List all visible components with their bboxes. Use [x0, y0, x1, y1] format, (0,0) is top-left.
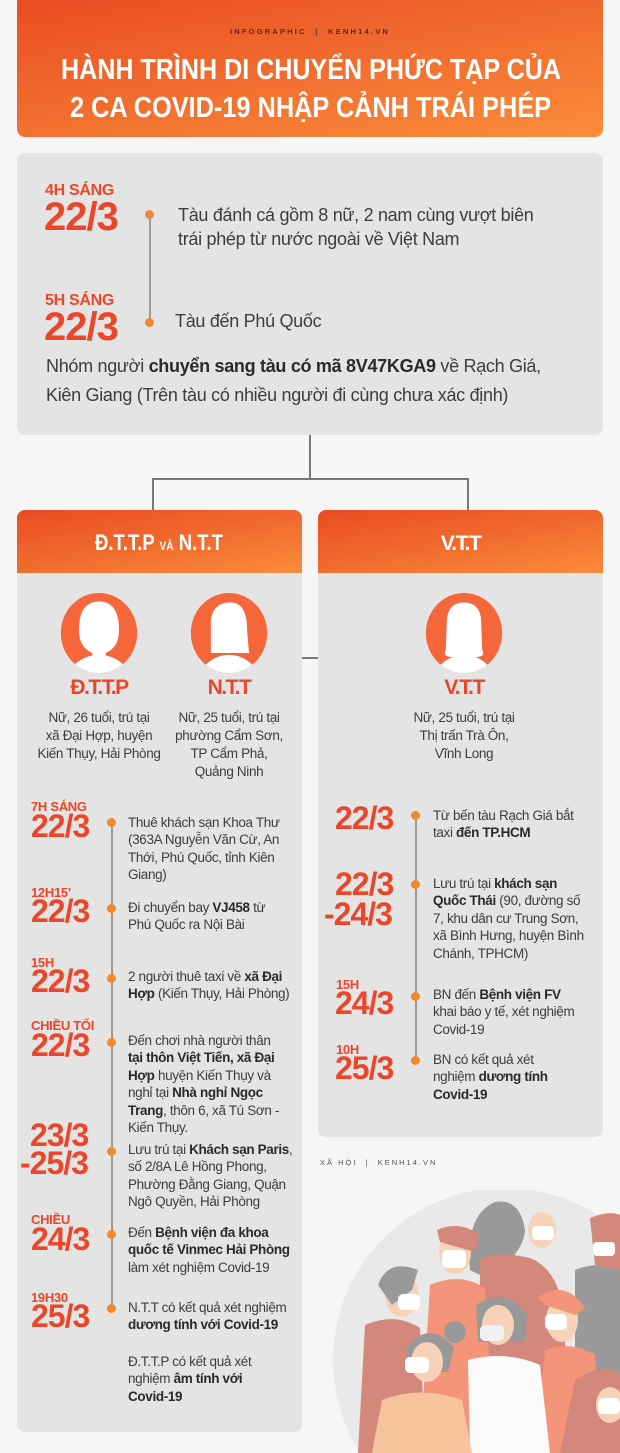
entry: chiều tối: CHIỀU TỐI: [31, 1018, 94, 1033]
entry 1: Tàu đánh cá gồm 8 nữ, 2 nam cùng vượt biên: [178, 205, 534, 225]
entry: 15h: 22/3: [31, 963, 89, 999]
entry: 19h30 25/3: N.T.T có kết quả xét nghiệm: [128, 1300, 286, 1315]
entry: 7h 22/3: [31, 799, 280, 882]
entry: chiều tối: tại thôn Việt Tiến, xã Đại: [128, 1050, 274, 1065]
man gray hair: [358, 1319, 425, 1453]
entry: 19h30 25/3: Đ.T.T.P có kết quả xét: [128, 1354, 251, 1369]
desc DTTP: Nữ, 26 tuổi, trú tại: [48, 710, 150, 725]
entry: 15h 24/3: [335, 977, 574, 1037]
panel header: [17, 510, 302, 573]
entry: 12h15: 22/3: [31, 893, 89, 929]
name VTT: V.T.T: [444, 676, 484, 699]
summary text: [46, 356, 541, 405]
entry: chiều tối: Đến chơi nhà người thân: [128, 1033, 271, 1048]
entry: 22/3: 22/3: [335, 800, 393, 836]
connector lines: [309, 435, 310, 478]
desc NTT: Nữ, 25 tuổi, trú tại: [178, 710, 280, 725]
entry: 22/3-24/3: Lưu trú tại khách sạn: [433, 876, 557, 891]
entry: 12h15: Đi chuyển bay VJ458 từ: [128, 900, 265, 915]
right woman: [575, 1265, 620, 1453]
entry: chiều tối: 22/3: [31, 1027, 89, 1063]
entry: 22/3-24/3: -24/3: [324, 896, 392, 932]
entry: chiều tối: Kiến Thụy.: [128, 1120, 188, 1135]
icon: avatar NTT: [190, 593, 268, 673]
entry: 12h15: [31, 885, 266, 932]
entry: 15h 24/3: BN đến Bệnh viện FV: [433, 987, 561, 1002]
desc NTT: Quảng Ninh: [195, 764, 263, 779]
desc DTTP: Kiến Thụy, Hải Phòng: [37, 746, 161, 761]
entry: 15h 24/3: Covid-19: [433, 1022, 484, 1037]
entry 1: trái phép từ nước ngoài về Việt Nam: [178, 229, 459, 249]
entry: 10h 25/3: 10H: [336, 1042, 359, 1057]
entry: 15h 24/3: khai báo y tế, xét nghiệm: [433, 1004, 574, 1019]
entry: 7h 22/3: (363A Nguyễn Văn Cừ, An: [128, 832, 279, 847]
entry: 23/3-25/3: -25/3: [20, 1145, 88, 1181]
entry: 7h 22/3: 7H SÁNG: [31, 799, 87, 814]
entry: 7h 22/3: Giang): [128, 867, 166, 882]
icon: avatar DTTP: [60, 593, 138, 673]
entry 1: 22/3: [44, 195, 118, 239]
entry: chiều tối: Trang, thôn 6, xã Tú Sơn -: [128, 1103, 279, 1118]
entry: 19h30 25/3: nghiệm âm tính với: [128, 1371, 242, 1386]
entry: 12h15: 12H15’: [31, 885, 71, 900]
panel: right person: [318, 510, 603, 1137]
desc DTTP: xã Đại Hợp, huyện: [46, 728, 152, 743]
entry 2: 22/3: [44, 305, 118, 349]
panel: intro timeline: [17, 153, 603, 435]
entry: 15h: [31, 955, 289, 1001]
panel header: Đ.T.T.P VÀ N.T.T: [95, 530, 223, 555]
entry: chiều 24/3: 24/3: [31, 1221, 89, 1257]
entry: chiều 24/3: quốc tế Vinmec Hải Phòng: [128, 1242, 290, 1257]
entry: 12h15: Phú Quốc ra Nội Bài: [128, 917, 244, 932]
entry: 10h 25/3: Covid-19: [433, 1087, 487, 1102]
entry: 10h 25/3: BN có kết quả xét: [433, 1052, 534, 1067]
entry: 19h30 25/3: Covid-19: [128, 1389, 182, 1404]
man red hair: [420, 1279, 495, 1453]
entry: 19h30 25/3: dương tính với Covid-19: [128, 1317, 278, 1332]
entry: 10h 25/3: [335, 1042, 548, 1102]
entry: 19h30 25/3: 25/3: [31, 1298, 89, 1334]
illustration: masked crowd: [333, 1190, 620, 1453]
entry: 15h 24/3: 15H: [336, 977, 359, 992]
name DTTP: Đ.T.T.P: [70, 676, 128, 699]
desc VTT: [413, 710, 515, 761]
summary text: Nhóm người chuyển sang tàu có mã 8V47KGA9 về Rạch Giá,: [46, 356, 541, 376]
entry: 15h: 2 người thuê taxi về xã Đại: [128, 969, 282, 984]
entry: 23/3-25/3: 23/3: [30, 1117, 88, 1153]
entry: 23/3-25/3: số 2/8A Lê Hồng Phong,: [128, 1159, 267, 1174]
name NTT: N.T.T: [208, 676, 250, 699]
entry 1: 4H SÁNG: [45, 182, 114, 199]
entry: 22/3-24/3: [324, 866, 584, 961]
entry: 19h30 25/3: 19H30: [31, 1290, 68, 1305]
short-hair woman: [468, 1356, 550, 1453]
panel header: V.T.T: [441, 532, 480, 555]
entry: 10h 25/3: nghiệm dương tính: [433, 1069, 548, 1084]
entry: 22/3: [335, 800, 574, 840]
entry: 22/3: Từ bến tàu Rạch Giá bắt: [433, 808, 574, 823]
entry: 23/3-25/3: Phường Đằng Giang, Quận: [128, 1177, 286, 1192]
footer credit: XÃ HỘI | KENH14.VN: [320, 1158, 437, 1167]
entry: 7h 22/3: 22/3: [31, 808, 89, 844]
desc VTT: Nữ, 25 tuổi, trú tại: [413, 710, 515, 725]
bun woman: [372, 1392, 472, 1453]
desc VTT: Thị trấn Trà Ôn,: [420, 728, 508, 743]
entry: chiều tối: [31, 1018, 279, 1135]
entry: chiều 24/3: [31, 1212, 290, 1275]
entry: 22/3-24/3: Quốc Thái (90, đường số: [433, 893, 580, 908]
entry: chiều 24/3: CHIỀU: [31, 1212, 70, 1227]
entry 2: [44, 291, 322, 349]
kicker: INFOGRAPHIC | KENH14.VN: [230, 27, 390, 36]
desc NTT: TP Cẩm Phả,: [191, 746, 267, 761]
entry: 23/3-25/3: Lưu trú tại Khách sạn Paris,: [128, 1142, 292, 1157]
entry: 7h 22/3: Thuê khách sạn Khoa Thư: [128, 815, 280, 830]
summary text: Kiên Giang (Trên tàu có nhiều người đi cùng chưa xác định): [46, 385, 508, 405]
panel header: [318, 510, 603, 573]
orange-hair man: [535, 1346, 600, 1453]
bottom right woman: [560, 1369, 620, 1453]
entry: 22/3: taxi đến TP.HCM: [433, 825, 530, 840]
entry: 15h: Hợp (Kiến Thụy, Hải Phòng): [128, 986, 289, 1001]
back woman long hair: [469, 1202, 525, 1280]
entry: 22/3-24/3: 7, khu dân cư Trung Sơn,: [433, 911, 578, 926]
entry: 15h 24/3: 24/3: [335, 985, 393, 1021]
title: [61, 52, 561, 124]
header banner: [17, 0, 603, 137]
entry: 23/3-25/3: [20, 1117, 292, 1209]
desc NTT: phường Cẩm Sơn,: [175, 728, 283, 743]
panel: left persons: [17, 510, 302, 1432]
entry: 15h: 15H: [31, 955, 54, 970]
desc VTT: Vĩnh Long: [435, 746, 493, 761]
entry: chiều 24/3: làm xét nghiệm Covid-19: [128, 1260, 269, 1275]
entry: 22/3-24/3: xã Bình Hưng, huyện Bình: [433, 928, 584, 943]
entry: 7h 22/3: Thới, Phú Quốc, tỉnh Kiên: [128, 850, 274, 865]
entry: chiều 24/3: Đến Bệnh viện đa khoa: [128, 1225, 268, 1240]
entry: chiều tối: Hợp huyện Kiến Thụy và: [128, 1068, 271, 1083]
desc DTTP: [37, 710, 161, 761]
entry: 22/3-24/3: Chánh, TPHCM): [433, 946, 528, 961]
entry: 22/3-24/3: 22/3: [335, 866, 393, 902]
icon: avatar VTT: [426, 593, 502, 673]
entry 2: Tàu đến Phú Quốc: [175, 311, 321, 331]
entry 2: 5H SÁNG: [45, 292, 114, 309]
entry: 10h 25/3: 25/3: [335, 1050, 393, 1086]
entry: 19h30 25/3: [31, 1290, 286, 1404]
entry: 23/3-25/3: Ngô Quyền, Hải Phòng: [128, 1194, 260, 1209]
entry: chiều tối: nghỉ tại Nhà nghỉ Ngọc: [128, 1085, 263, 1100]
desc NTT: [175, 710, 283, 779]
entry 1: [44, 181, 534, 249]
